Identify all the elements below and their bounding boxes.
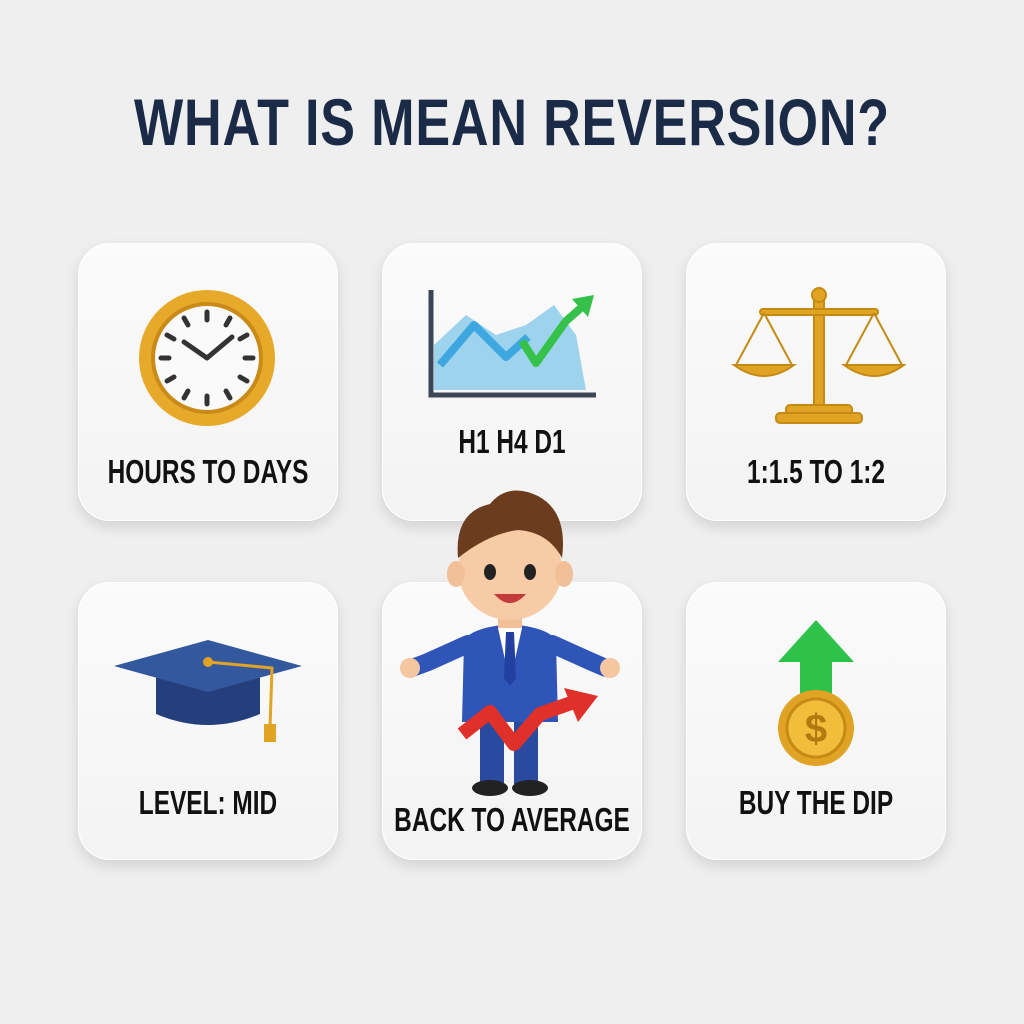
icon: arrow and coin	[778, 620, 854, 766]
panel: risk reward	[686, 243, 946, 521]
label: LEVEL: MID	[139, 784, 277, 821]
label: 1:1.5 TO 1:2	[747, 453, 885, 490]
icon: clock	[139, 290, 275, 426]
label: BUY THE DIP	[739, 784, 893, 821]
panel: level	[78, 582, 338, 860]
icon: graduation cap	[114, 640, 302, 742]
title: WHAT IS MEAN REVERSION?	[134, 85, 890, 159]
panel: hours to days	[78, 243, 338, 521]
label: HOURS TO DAYS	[108, 453, 308, 490]
icon: scale	[731, 287, 906, 424]
icon: arrow and coin: $	[805, 707, 827, 751]
label: H1 H4 D1	[458, 423, 566, 460]
panel: back to average	[382, 582, 642, 860]
icon: chart	[428, 290, 596, 398]
character: businessman	[400, 490, 620, 796]
panel: buy the dip	[686, 582, 946, 860]
panel: timeframes	[382, 243, 642, 521]
label: BACK TO AVERAGE	[394, 801, 630, 838]
